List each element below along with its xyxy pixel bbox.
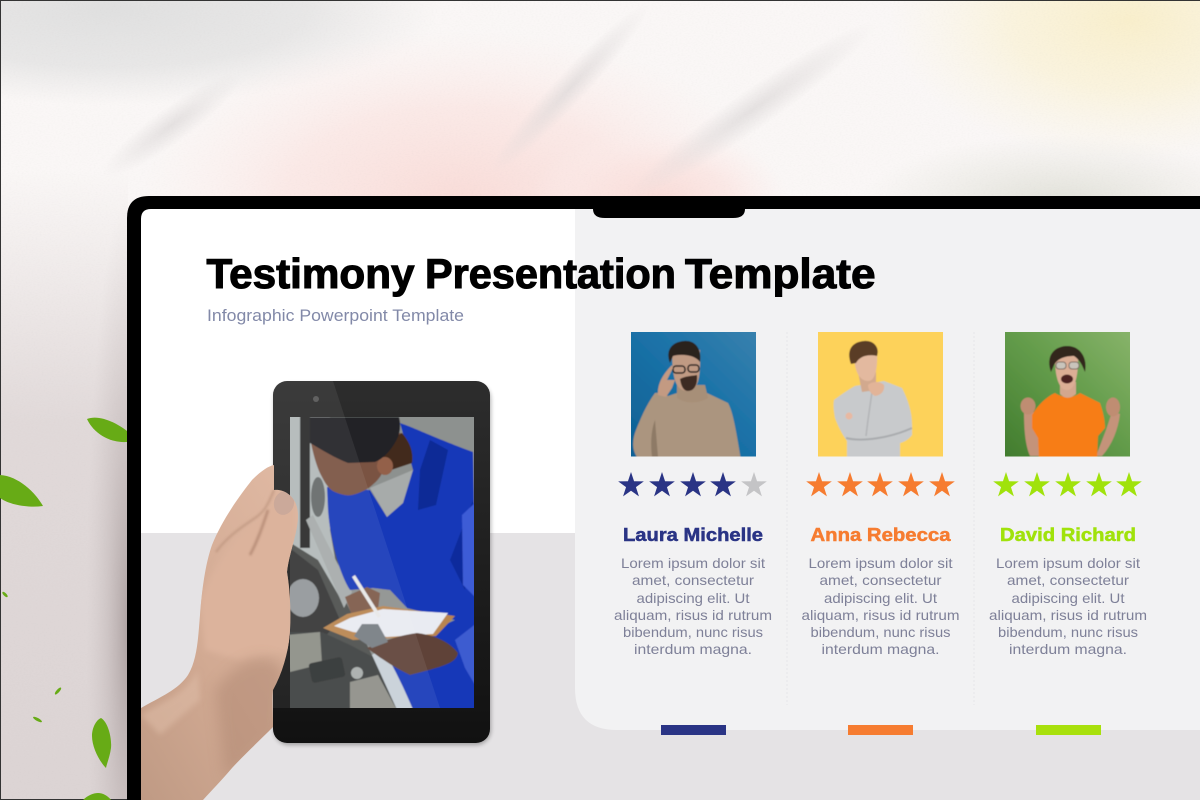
falling leaves	[0, 418, 127, 800]
portrait: David Richard	[1005, 332, 1130, 456]
name: Anna Rebecca: Anna Rebecca	[810, 525, 952, 545]
leaf: tiny lower	[32, 716, 43, 723]
accent bar: orange	[848, 725, 913, 735]
body text: David Richard: adipiscing elit. Ut	[1012, 590, 1125, 606]
testimonial card: Anna Rebecca	[802, 328, 960, 735]
leaf: top right	[87, 418, 127, 442]
testimonial card: David Richard	[989, 328, 1147, 735]
camera notch	[593, 209, 745, 218]
star rating: 4 of 5	[618, 472, 767, 496]
device frame	[127, 196, 1200, 800]
name: Laura Michelle: Laura Michelle	[623, 525, 763, 545]
leaf: tiny middle	[54, 687, 62, 695]
body text: David Richard: aliquam, risus id rutrum	[989, 607, 1147, 623]
slide screen	[141, 209, 1200, 800]
star rating: 5 of 5	[806, 472, 955, 496]
leaf: left	[0, 475, 43, 507]
body text: Anna Rebecca: amet, consectetur	[820, 572, 942, 588]
column dividers	[787, 332, 974, 705]
body text: Laura Michelle: interdum magna.	[634, 641, 752, 657]
body text: Anna Rebecca	[802, 555, 960, 657]
portrait: Laura Michelle	[631, 332, 756, 456]
body text: Laura Michelle: Lorem ipsum dolor sit	[621, 555, 765, 571]
body text: David Richard: Lorem ipsum dolor sit	[996, 555, 1140, 571]
slide upper white area	[141, 209, 575, 533]
mechanic photo on screen	[286, 413, 478, 712]
body text: David Richard	[989, 555, 1147, 657]
tablet body	[273, 381, 490, 743]
tablet glass reflection	[273, 381, 440, 708]
subtitle: Infographic Powerpoint Template	[207, 306, 464, 325]
accent bar: lime	[1036, 725, 1101, 735]
name: David Richard: David Richard	[1000, 525, 1136, 545]
tablet shadow	[274, 384, 491, 745]
body text: Laura Michelle: aliquam, risus id rutrum	[614, 607, 772, 623]
body text: Anna Rebecca: Lorem ipsum dolor sit	[808, 555, 953, 571]
hand holding tablet	[141, 460, 306, 800]
star rating: 5 of 5	[993, 472, 1142, 496]
body text: Anna Rebecca: interdum magna.	[822, 641, 940, 657]
tablet camera	[313, 396, 319, 402]
title: Presentation	[425, 250, 676, 297]
slide lower grey band	[141, 533, 1200, 800]
leaf: large lower	[92, 718, 111, 768]
testimonial card: Laura Michelle	[614, 328, 772, 735]
body text: Anna Rebecca: aliquam, risus id rutrum	[802, 607, 960, 623]
body text: Anna Rebecca: adipiscing elit. Ut	[824, 590, 937, 606]
leaf: bottom edge	[83, 793, 111, 800]
testimonial panel background	[575, 209, 1200, 730]
leaf: tiny left	[1, 591, 9, 598]
title	[206, 250, 876, 297]
body text: Laura Michelle: amet, consectetur	[632, 572, 754, 588]
body text: David Richard: interdum magna.	[1009, 641, 1127, 657]
portrait: Anna Rebecca	[818, 332, 943, 456]
body text: David Richard: bibendum, nunc risus	[998, 624, 1138, 640]
body text: David Richard: amet, consectetur	[1007, 572, 1129, 588]
title: Testimony	[206, 250, 415, 297]
title: Template	[685, 250, 876, 297]
accent bar: navy	[661, 725, 726, 735]
body text: Laura Michelle: adipiscing elit. Ut	[636, 590, 750, 606]
body text: Laura Michelle	[614, 555, 772, 657]
body text: Anna Rebecca: bibendum, nunc risus	[810, 624, 950, 640]
tablet in hand illustration	[141, 381, 491, 800]
body text: Laura Michelle: bibendum, nunc risus	[623, 624, 763, 640]
